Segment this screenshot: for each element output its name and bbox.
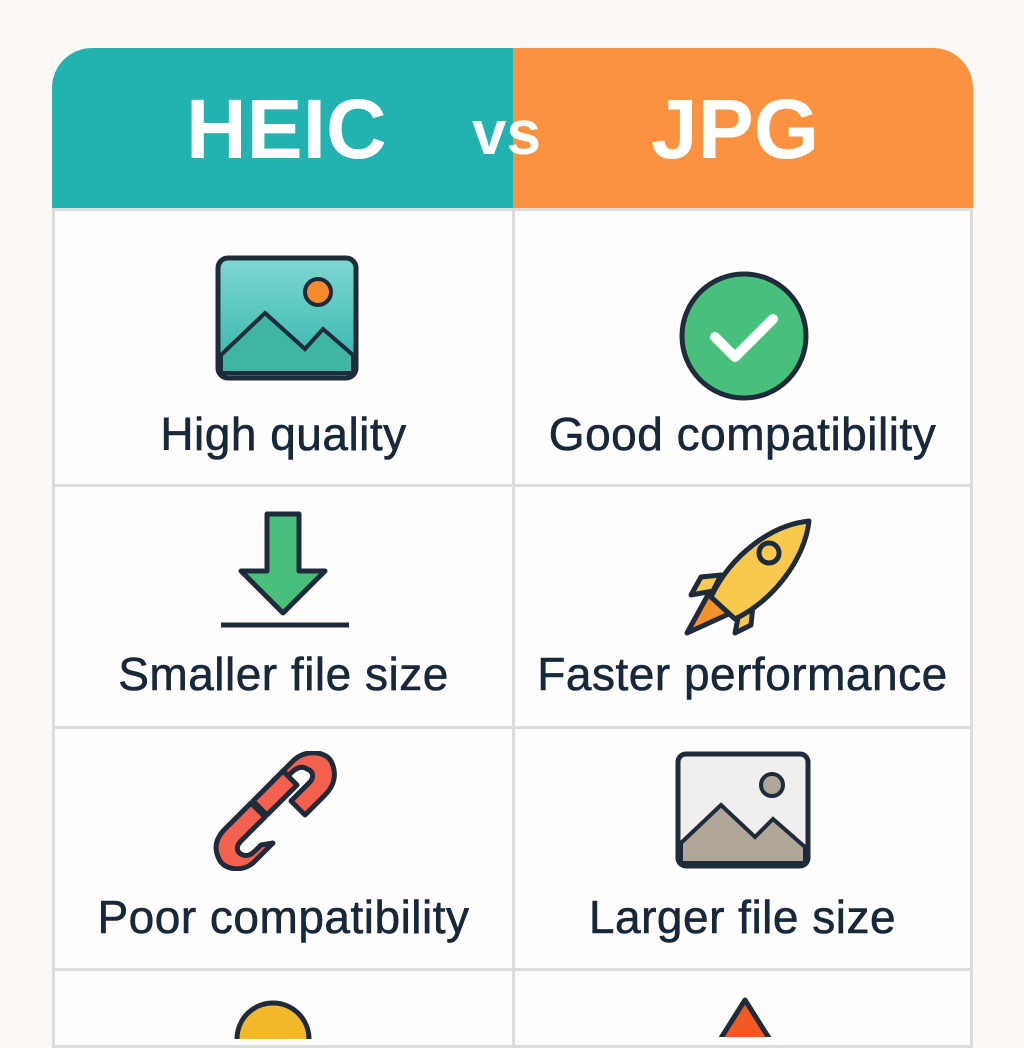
cell: row 4 right [512,968,973,1048]
cell: faster performance [512,484,973,729]
label: Smaller file size [118,648,449,700]
cell: high quality [52,208,515,487]
icon: image [216,256,358,380]
cell: poor compatibility [52,726,515,971]
icon: rocket [684,518,812,636]
cell: larger file size [512,726,973,971]
cell: smaller file size [52,484,515,729]
label: High quality [160,408,407,460]
header: JPG [513,48,973,210]
icon: orange triangle [718,998,772,1037]
cell: good compatibility [512,208,973,487]
header: JPG: JPG [651,82,819,176]
label: Larger file size [589,891,896,943]
label: Poor compatibility [97,891,470,943]
icon: download arrow [221,512,349,628]
icon: check [680,272,808,400]
icon: broken link [214,751,337,871]
header: HEIC [52,48,513,210]
label: Faster performance [537,648,948,700]
cell: row 4 left [52,968,515,1048]
vs label: vs [472,99,541,168]
label: Good compatibility [549,408,936,460]
header: HEIC: HEIC [186,82,387,176]
icon: gray image [676,752,810,868]
icon: yellow coin [234,1000,312,1039]
